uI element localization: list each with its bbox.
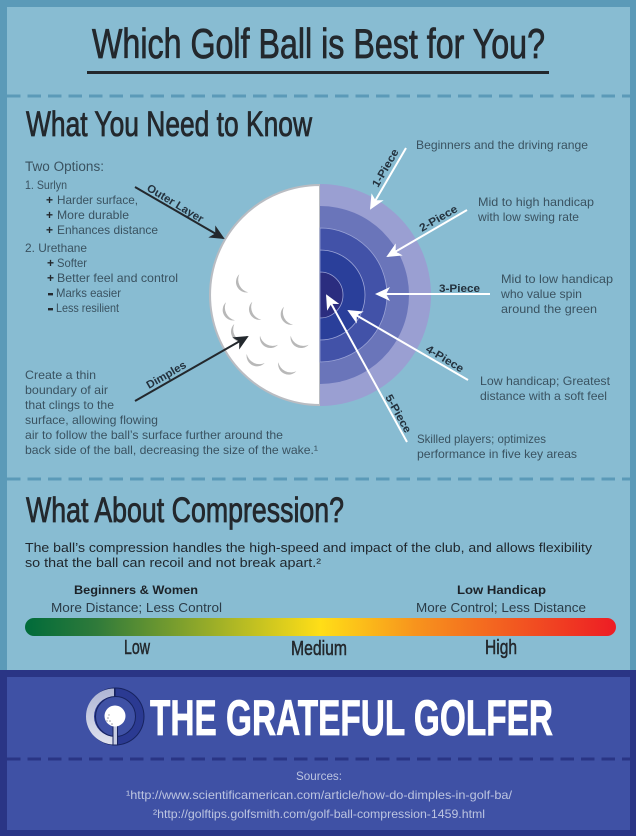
arrow: 3-piece: 3-Piece — [439, 283, 480, 295]
layer rings — [320, 184, 431, 406]
text block: two options: 2. Urethane — [25, 241, 87, 255]
text: 3-piece description: Mid to low handicap — [501, 272, 613, 286]
scale labels — [124, 637, 517, 660]
text: 3-piece description — [500, 272, 613, 316]
label: low handicap: More Control; Less Distance — [416, 600, 586, 615]
text: 5-piece description: Skilled players; optimizes — [417, 432, 546, 446]
arrow: 5-piece: 5-Piece — [382, 393, 413, 435]
label: beginners and women: More Distance; Less Control — [51, 600, 222, 615]
text block: two options: + — [47, 256, 54, 270]
icon: grateful golfer logo — [86, 688, 144, 746]
text: 4-piece description: distance with a soft feel — [480, 389, 607, 403]
text block: two options — [25, 159, 178, 315]
text block: dimples explanation: back side of the ball, decreasing the size of the wake.¹ — [25, 443, 318, 457]
text block: compression intro — [25, 540, 593, 570]
label: low handicap: Low Handicap — [457, 583, 546, 597]
arrow: 4-piece — [349, 311, 468, 380]
text: 5-piece description: performance in five key areas — [417, 447, 577, 461]
text block: sources: ²http://golftips.golfsmith.com/golf-ball-compression-1459.html — [153, 807, 485, 821]
heading: what you need to know: What You Need to Know — [26, 105, 313, 144]
text: 2-piece description — [477, 195, 594, 224]
text block: two options: Better feel and control — [57, 271, 178, 285]
arrow: dimples: Dimples — [144, 359, 189, 392]
text block: two options: 1. Surlyn — [25, 178, 67, 192]
text block: dimples explanation: Create a thin — [25, 368, 96, 382]
text block: two options: Less resilient — [56, 301, 120, 315]
text block: two options: Enhances distance — [57, 223, 158, 237]
text block: dimples explanation — [25, 368, 318, 457]
arrow: 1-piece: 1-Piece — [370, 147, 402, 190]
scale labels: Low — [124, 637, 150, 659]
text block: two options: + — [46, 223, 53, 237]
scale labels: High — [485, 637, 517, 659]
text block: two options: Harder surface, — [57, 193, 138, 207]
text block: two options: + — [46, 208, 53, 222]
text block: two options: + — [47, 271, 54, 285]
arrow: 2-piece: 2-Piece — [418, 203, 460, 235]
text block: two options: Two Options: — [25, 159, 104, 174]
text block: dimples explanation: surface, allowing flowing — [25, 413, 158, 427]
text: 2-piece description: Mid to high handicap — [478, 195, 594, 209]
text: 3-piece description: around the green — [501, 302, 597, 316]
dimples — [223, 274, 309, 375]
arrow: 3-piece — [377, 283, 490, 295]
text block: dimples explanation: that clings to the — [25, 398, 114, 412]
text block: sources: ¹http://www.scientificamerican.com/article/how-do-dimples-in-golf-ba/ — [126, 788, 513, 802]
arrow: 4-piece: 4-Piece — [423, 343, 466, 375]
label: beginners and women: Beginners & Women — [74, 583, 198, 597]
panel: footer — [0, 670, 636, 836]
chart: compression gradient bar — [25, 618, 616, 636]
text block: dimples explanation: boundary of air — [25, 383, 108, 397]
ball left half — [210, 185, 320, 405]
text block: dimples explanation: air to follow the ball’s surface further around the — [25, 428, 283, 442]
arrow: dimples — [135, 337, 247, 401]
text block: sources: Sources: — [296, 769, 342, 783]
chart: golf ball cross-section — [210, 184, 431, 406]
text block: compression intro: The ball’s compression handles the high-speed and impact of the club, and allows flexibility — [25, 540, 593, 555]
text: 5-piece description — [417, 432, 577, 461]
text: 3-piece description: who value spin — [500, 287, 582, 301]
heading: what about compression: What About Compression? — [26, 491, 344, 530]
text: 4-piece description: Low handicap; Greatest — [480, 374, 611, 388]
text block: sources — [126, 769, 513, 821]
arrow: outer layer — [135, 182, 223, 238]
text: 1-piece description: Beginners and the driving range — [416, 138, 588, 152]
arrow: outer layer: Outer Layer — [144, 182, 206, 226]
scale labels: Medium — [291, 638, 347, 660]
text block: compression intro: so that the ball can recoil and not break apart.² — [25, 555, 322, 570]
arrow: 1-piece — [370, 147, 406, 208]
text block: two options: More durable — [57, 208, 129, 222]
text block: two options: Softer — [57, 256, 87, 270]
label: low handicap — [416, 583, 586, 615]
label: beginners and women — [51, 583, 222, 615]
text: 4-piece description — [480, 374, 611, 403]
text: 2-piece description: with low swing rate — [477, 210, 579, 224]
arrow: 5-piece — [327, 296, 413, 442]
text block: two options: Marks easier — [56, 286, 121, 300]
arrow: 2-piece — [388, 203, 467, 256]
text block: two options: + — [46, 193, 53, 207]
